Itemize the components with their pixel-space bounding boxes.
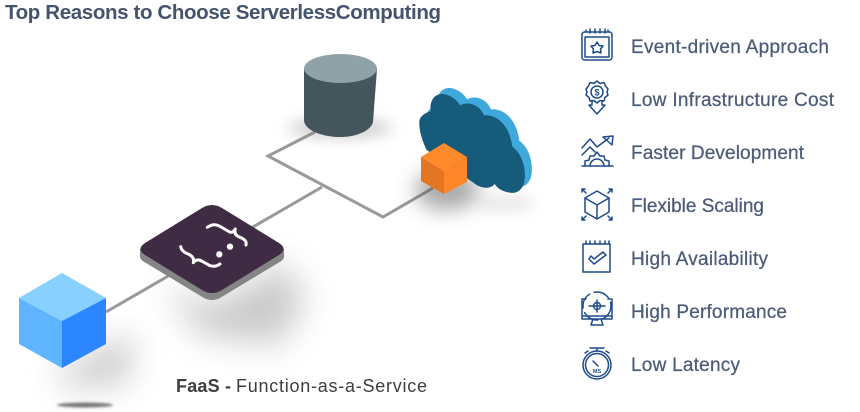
icon: stopwatch	[583, 348, 611, 379]
FaaS caption: Function-as-a-Service	[236, 376, 427, 396]
database cylinder	[288, 54, 392, 138]
icon: gear with dollar and down arrow: $	[594, 88, 600, 98]
item: faster development: Faster Development	[631, 143, 805, 164]
item: low infrastructure cost: Low Infrastructure Cost	[631, 90, 835, 111]
item: flexible scaling: Flexible Scaling	[631, 196, 764, 217]
blue cube	[19, 273, 135, 408]
orange cube	[421, 143, 467, 194]
icon: gear with growth arrow	[582, 136, 613, 166]
icon: calendar with check	[583, 241, 610, 272]
title: Top Reasons to Choose ServerlessComputing	[5, 1, 441, 24]
icon: gear with dollar and down arrow	[586, 81, 608, 114]
icon: stopwatch: MS	[593, 369, 601, 375]
item: faster development	[582, 136, 805, 166]
item: low latency: Low Latency	[631, 355, 740, 376]
item: high performance	[582, 292, 787, 325]
item: flexible scaling	[582, 189, 764, 220]
icon: calendar star	[582, 29, 612, 60]
cloud back layer	[426, 88, 532, 187]
item: high availability	[583, 241, 768, 272]
item: event-driven approach: Event-driven Approach	[631, 37, 829, 58]
item: low infrastructure cost	[586, 81, 835, 114]
cloud with orange cube	[415, 88, 535, 212]
FaaS caption: FaaS -	[176, 376, 231, 396]
icon: curly braces with dots	[181, 225, 246, 266]
icon: monitor with gauge	[582, 292, 612, 325]
item: event-driven approach	[582, 29, 829, 60]
function tile	[140, 205, 305, 345]
cloud front layer	[419, 94, 525, 193]
item: high performance: High Performance	[631, 302, 787, 323]
item: high availability: High Availability	[631, 249, 768, 270]
connector lines	[106, 132, 433, 312]
item: low latency	[583, 348, 740, 379]
icon: box with expanding arrows	[582, 189, 612, 220]
